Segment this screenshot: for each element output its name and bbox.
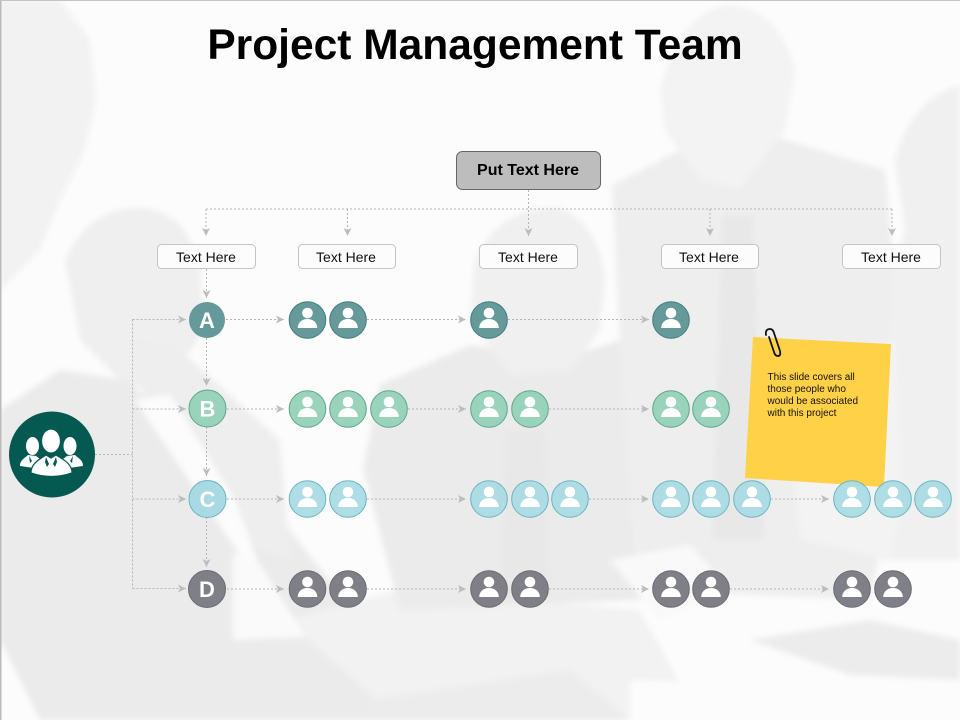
sticky note — [745, 337, 891, 487]
row B — [189, 390, 729, 427]
top box: Put Text Here — [477, 162, 579, 179]
sticky note: those people who — [768, 384, 846, 395]
people C — [289, 481, 951, 517]
letter B: B — [200, 396, 215, 422]
sticky note: This slide covers all — [768, 372, 855, 383]
column headers: Text Here — [498, 249, 558, 265]
sticky note: would be associated — [766, 396, 858, 407]
letter B — [189, 390, 226, 427]
letter A: A — [199, 308, 215, 333]
row C — [189, 480, 951, 518]
icon: paperclip — [766, 329, 780, 356]
sticky note: with this project — [766, 408, 837, 419]
letter C: C — [200, 487, 216, 512]
letter A — [189, 302, 225, 338]
people A — [289, 302, 689, 338]
icon: team — [9, 412, 95, 498]
row A — [189, 302, 689, 338]
column headers: Text Here — [316, 249, 376, 265]
column headers — [158, 244, 940, 268]
people B — [289, 391, 729, 427]
column headers: Text Here — [176, 249, 236, 265]
letter D — [188, 570, 226, 608]
row D — [188, 570, 911, 608]
people D — [289, 571, 911, 607]
letter D: D — [199, 577, 215, 602]
column headers: Text Here — [861, 249, 921, 265]
letter C — [189, 480, 226, 518]
title: Project Management Team — [207, 22, 743, 69]
top-level connectors — [95, 190, 892, 589]
column headers: Text Here — [679, 249, 739, 265]
top box — [456, 152, 600, 190]
